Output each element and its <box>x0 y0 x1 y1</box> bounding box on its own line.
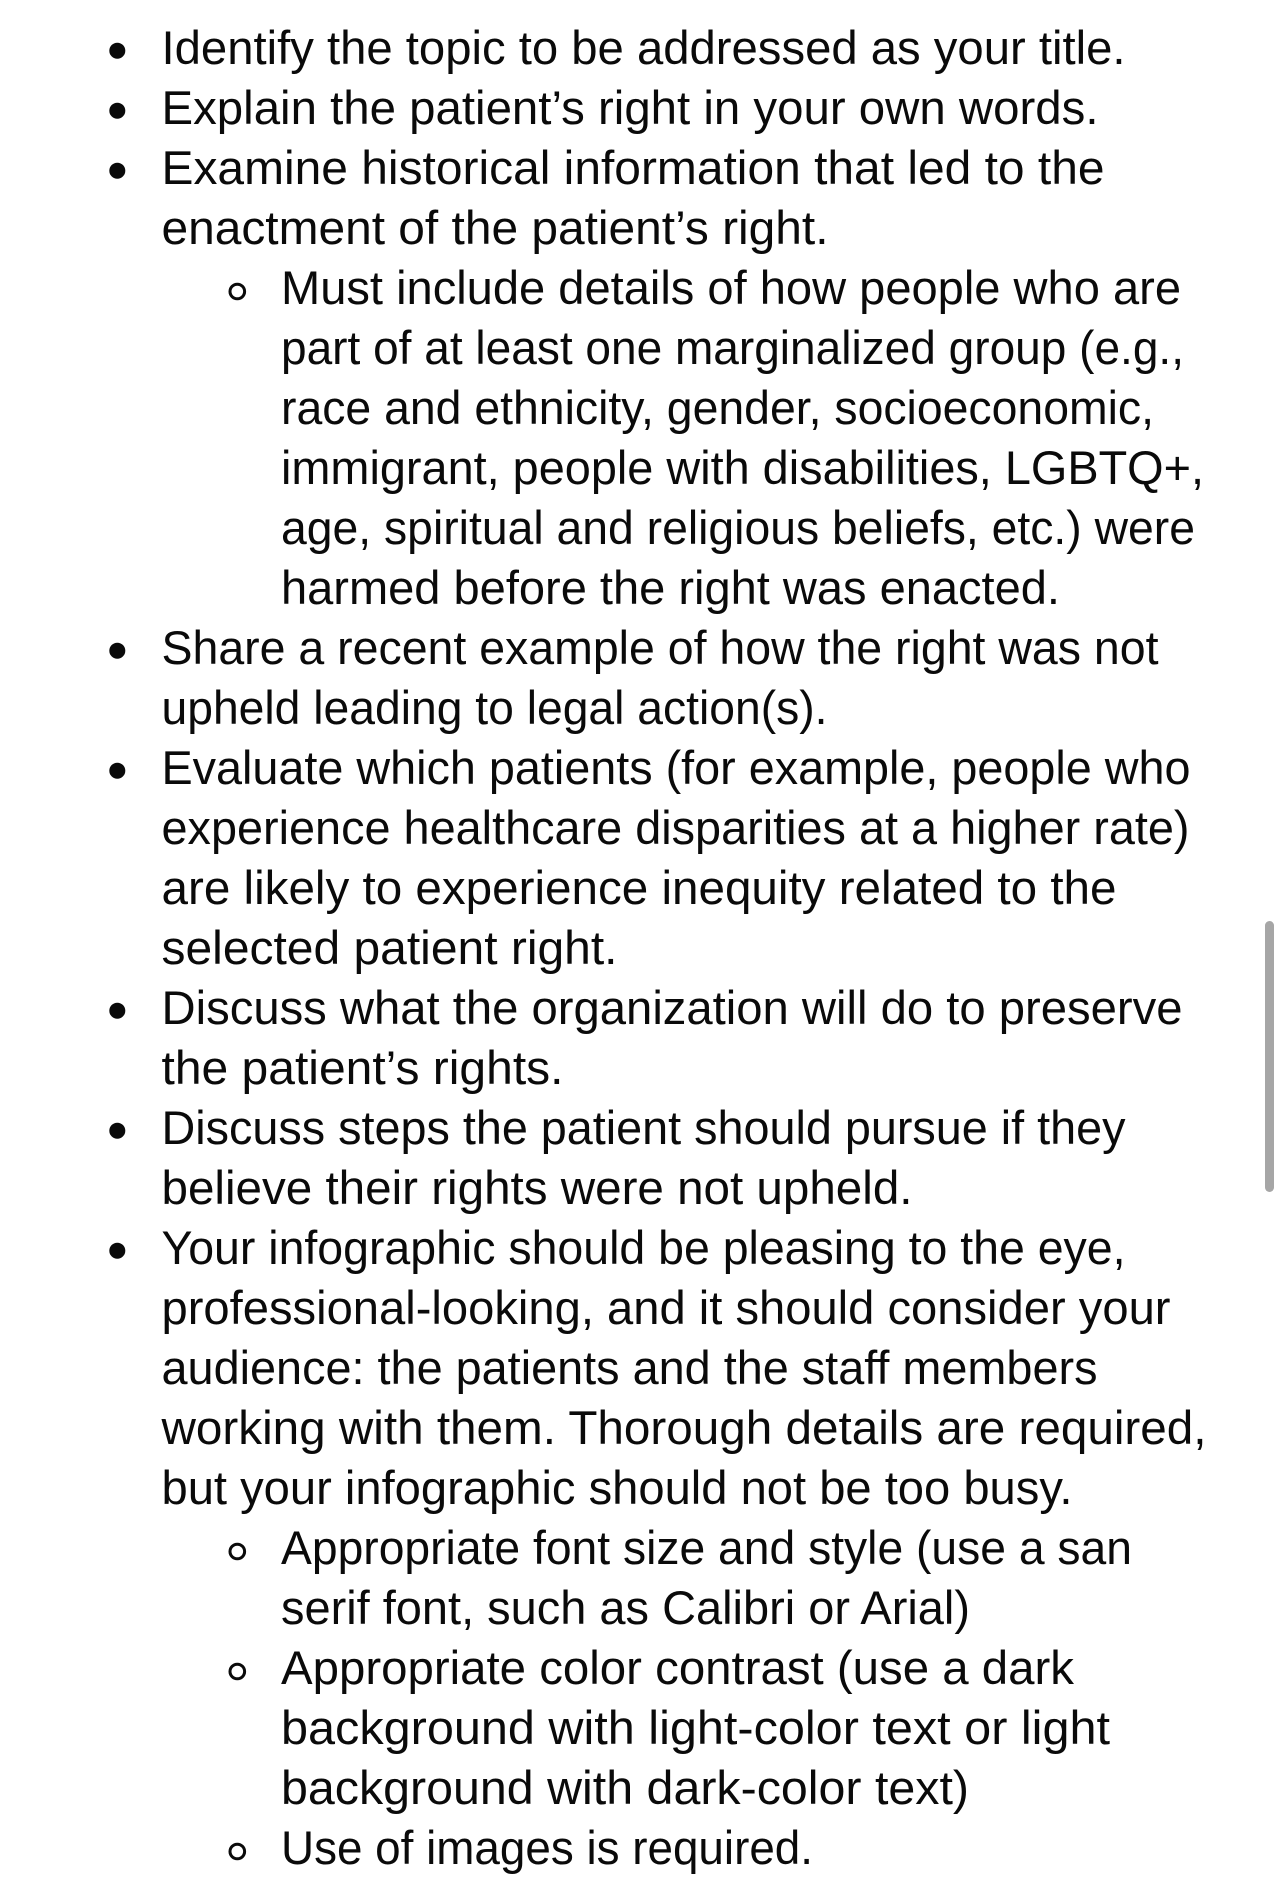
sub-bullet: marginalized group details: Must include details of how people who are <box>281 261 1181 314</box>
bullet: recent example: upheld leading to legal action(s). <box>162 681 828 734</box>
sub-bullet: images required: Use of images is required. <box>281 1821 813 1874</box>
bullet: recent example: Share a recent example of how the right was not <box>162 621 1158 674</box>
bullet: evaluate patients: selected patient right. <box>162 921 618 974</box>
sub-bullet: marginalized group details: part of at least one marginalized group (e.g., <box>281 321 1184 374</box>
sub-bullet: marginalized group details: age, spiritual and religious beliefs, etc.) were <box>281 501 1195 554</box>
bullet: infographic design <box>109 1221 1206 1514</box>
sub-bullet: color contrast: background with light-color text or light <box>281 1701 1110 1754</box>
bullet: examine history: Examine historical information that led to the <box>162 141 1104 194</box>
bullet: evaluate patients <box>109 741 1190 974</box>
bullet: patient steps <box>109 1101 1126 1214</box>
bullet: evaluate patients: are likely to experience inequity related to the <box>162 861 1116 914</box>
sub-bullet: font size and style: serif font, such as Calibri or Arial) <box>281 1581 970 1634</box>
sub-bullet: color contrast <box>230 1641 1110 1814</box>
sub-bullet: color contrast: background with dark-color text) <box>281 1761 969 1814</box>
bullet: patient steps: believe their rights were not upheld. <box>162 1161 913 1214</box>
sub-bullet: marginalized group details: race and ethnicity, gender, socioeconomic, <box>281 381 1154 434</box>
bullet: infographic design: Your infographic should be pleasing to the eye, <box>162 1221 1126 1274</box>
bullet: infographic design: working with them. Thorough details are required, <box>160 1401 1207 1454</box>
bullet: evaluate patients: experience healthcare disparities at a higher rate) <box>162 801 1190 854</box>
bullet: organization preserves rights: Discuss what the organization will do to preserve <box>162 981 1182 1034</box>
bullet: infographic design: but your infographic should not be too busy. <box>162 1461 1072 1514</box>
bullet: infographic design: audience: the patients and the staff members <box>162 1341 1098 1394</box>
sub-bullet: marginalized group details <box>230 261 1204 614</box>
bullet: organization preserves rights <box>109 981 1182 1094</box>
bullet: recent example <box>109 621 1158 734</box>
bullet: patient steps: Discuss steps the patient should pursue if they <box>162 1101 1126 1154</box>
bullet: organization preserves rights: the patient’s rights. <box>162 1041 564 1094</box>
sub-bullet: color contrast: Appropriate color contrast (use a dark <box>281 1641 1074 1694</box>
sub-bullet: font size and style <box>230 1521 1132 1634</box>
scrollbar <box>1265 921 1274 1192</box>
bullet: evaluate patients: Evaluate which patients (for example, people who <box>162 741 1190 794</box>
sub-bullet: marginalized group details: harmed before the right was enacted. <box>281 561 1060 614</box>
bullet: explain right: Explain the patient’s right in your own words. <box>162 81 1098 134</box>
bullet: infographic design: professional-looking, and it should consider your <box>162 1281 1170 1334</box>
bullet: examine history: enactment of the patient’s right. <box>162 201 829 254</box>
sub-bullet: marginalized group details: immigrant, people with disabilities, LGBTQ+, <box>281 441 1204 494</box>
sub-bullet: font size and style: Appropriate font size and style (use a san <box>281 1521 1132 1574</box>
bullet: examine history <box>109 141 1105 254</box>
bullet: identify topic: Identify the topic to be addressed as your title. <box>162 21 1126 74</box>
